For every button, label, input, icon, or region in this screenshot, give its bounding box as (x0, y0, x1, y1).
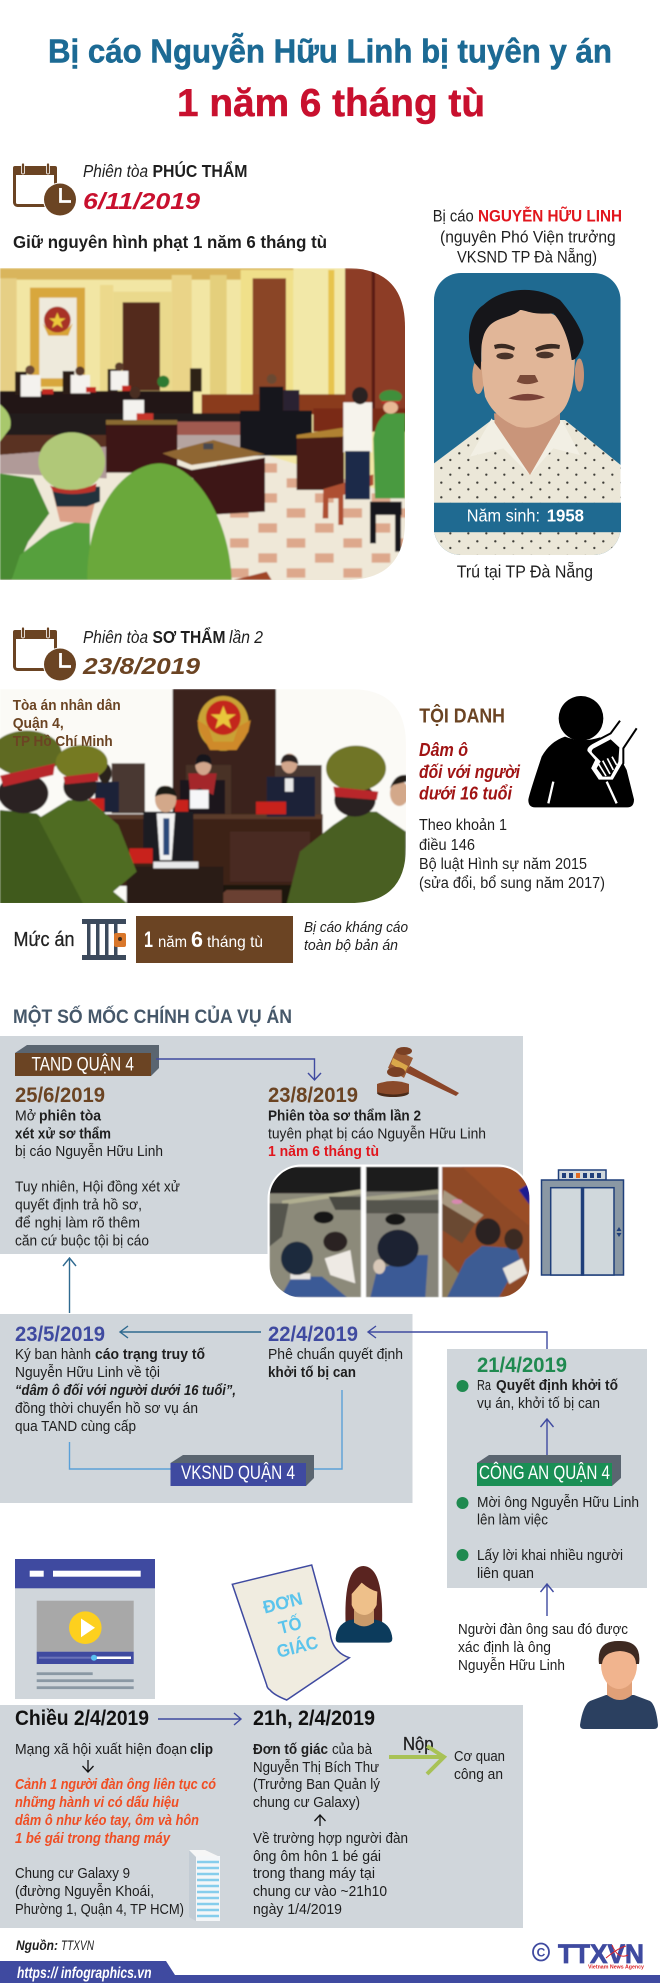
text: 23/8/2019: 1 năm 6 tháng tù (268, 1143, 379, 1160)
bullet text: decision: Ra (477, 1377, 491, 1394)
bullet text: summons: lên làm việc (477, 1512, 548, 1528)
text: clip appears: Mạng xã hội xuất hiện đoạn (15, 1741, 187, 1758)
icon: elevator (542, 1170, 624, 1275)
text: clip description: 1 bé gái trong thang máy (15, 1830, 171, 1847)
legal basis text: (sửa đổi, bổ sung năm 2017) (419, 875, 605, 892)
arrow: TAND to sentence (156, 1059, 321, 1080)
arrow: 21/4 to 22/4 (368, 1326, 547, 1349)
text: address: (đường Nguyễn Khoái, (15, 1883, 154, 1900)
icon: complaint letter (232, 1565, 349, 1700)
appeal trial heading: Phiên tòa (83, 161, 148, 181)
text: case details: ông ôm hôn 1 bé gái (253, 1848, 381, 1865)
text: 25/6/2019: quyết định trả hồ sơ, (15, 1197, 142, 1214)
text: 25/6/2019 (15, 1083, 180, 1250)
text: 25/6/2019: căn cứ buộc tội bị cáo (15, 1232, 149, 1250)
text: 23/5/2019: cáo trạng truy tố (95, 1346, 205, 1363)
arrow: afternoon to night (158, 1713, 241, 1725)
text: 21/4/2019: 21/4/2019 (477, 1353, 567, 1377)
text: clip description: dâm ô như kéo tay, ôm và hôn (15, 1812, 199, 1829)
sentence box: 6 (191, 927, 203, 952)
text: 25/6/2019: để nghị làm rõ thêm (15, 1215, 140, 1232)
text: case details (253, 1830, 408, 1918)
legal basis text: điều 146 (419, 837, 475, 854)
text: clip description (15, 1776, 216, 1847)
bullet text: decision: Quyết định khởi tố (496, 1377, 618, 1394)
icon: gavel (377, 1047, 459, 1097)
defendant name and title: (nguyên Phó Viện trưởng (440, 229, 616, 247)
arrow: 22/4 to 23/5 (120, 1326, 261, 1338)
text: 22/4/2019: 22/4/2019 (268, 1322, 358, 1346)
arrow: up to TAND panel (63, 1258, 76, 1313)
appeal note: Bị cáo kháng cáo (304, 919, 408, 936)
date: afternoon: Chiều 2/4/2019 (15, 1706, 149, 1730)
text: 23/5/2019: 23/5/2019 (15, 1322, 105, 1346)
text: 23/8/2019: Phiên tòa sơ thẩm lần 2 (268, 1108, 421, 1125)
text: 25/6/2019: xét xử sơ thẩm (15, 1126, 111, 1142)
logo: TTXVN: TTXVN (558, 1939, 644, 1969)
source: TTXVN (61, 1937, 95, 1953)
text: address: Phường 1, Quận 4, TP HCM) (15, 1901, 184, 1918)
text: 25/6/2019: Tuy nhiên, Hội đồng xét xử (15, 1179, 180, 1196)
bullet text: summons (456, 1494, 639, 1528)
legal basis text (419, 817, 605, 892)
portrait card (434, 273, 621, 555)
text: case details: trong thang máy tại (253, 1865, 375, 1882)
text: address: Chung cư Galaxy 9 (15, 1865, 130, 1882)
text: clip description: những hành vi có dấu hiệu (15, 1794, 179, 1811)
appeal verdict text: Giữ nguyên hình phạt 1 năm 6 tháng tù (13, 232, 327, 252)
label: TAND Quận 4 (15, 1045, 159, 1076)
text: man identified: xác định là ông (458, 1639, 551, 1656)
icon: complaint letter: ĐƠN (261, 1588, 305, 1618)
court name: TP Hồ Chí Minh (13, 733, 113, 750)
connector: VKSND lines (70, 1390, 342, 1469)
text: clip appears: clip (190, 1741, 213, 1758)
photo: first-instance courtroom (0, 689, 409, 905)
defendant name and title: NGUYỄN HỮU LINH (478, 206, 622, 226)
icon: building (189, 1850, 220, 1921)
text: address (15, 1865, 184, 1918)
residence: Trú tại TP Đà Nẵng (457, 562, 593, 582)
text: 23/5/2019: qua TAND cùng cấp (15, 1418, 136, 1435)
text: 23/5/2019: Ký ban hành (15, 1346, 91, 1363)
text: police agency: Cơ quan (454, 1748, 505, 1765)
text: 22/4/2019 (268, 1322, 403, 1381)
arrow: submit to police (389, 1746, 444, 1774)
text: case details: chung cư vào ~21h10 (253, 1883, 387, 1900)
bullet text: statements (456, 1547, 623, 1582)
sentence box: tháng tù (207, 934, 263, 951)
label: VKSND Quận 4: VKSND QUẬN 4 (181, 1462, 295, 1484)
text: submit: Nộp (403, 1734, 434, 1754)
icon: calendar and clock (first-instance trial) (13, 627, 77, 682)
text: complaint: chung cư Galaxy) (253, 1794, 360, 1811)
photo: appeal courtroom (0, 268, 407, 582)
first-instance heading: SƠ THẨM (152, 626, 226, 647)
text: police agency (454, 1748, 505, 1783)
timeline heading: MỘT SỐ MỐC CHÍNH CỦA VỤ ÁN (13, 1004, 292, 1028)
sentence box: 1 (144, 927, 153, 952)
icon: video page (15, 1559, 155, 1699)
appeal note (304, 919, 408, 954)
label: VKSND Quận 4 (170, 1455, 314, 1486)
charge name: dưới 16 tuổi (419, 782, 513, 804)
bullet text: statements: Lấy lời khai nhiều người (477, 1547, 623, 1564)
icon: complaint letter: GIÁC (274, 1631, 320, 1662)
appeal trial date: 6/11/2019 (83, 188, 200, 214)
charge name: đối với người (419, 761, 521, 782)
panel: TAND Quận 4 (0, 1036, 523, 1254)
arrow: man to police panel (540, 1584, 554, 1616)
court name: Tòa án nhân dân (13, 697, 121, 714)
text: complaint: (Trưởng Ban Quản lý (253, 1776, 380, 1793)
text: complaint: Đơn tố giác (253, 1741, 328, 1758)
icon: calendar and clock (appeal trial) (13, 163, 77, 216)
first-instance heading: Phiên tòa (83, 627, 148, 647)
text: 25/6/2019: bị cáo Nguyễn Hữu Linh (15, 1143, 163, 1160)
label: TAND Quận 4: TAND QUẬN 4 (32, 1054, 134, 1076)
label: Công an Quận 4: CÔNG AN QUẬN 4 (479, 1462, 610, 1484)
sentence box (136, 916, 293, 963)
text: 23/5/2019 (15, 1322, 236, 1435)
panel: April 2 events (0, 1705, 523, 1928)
birth year band: Năm sinh: (467, 506, 540, 526)
bullet text: summons: Mời ông Nguyễn Hữu Linh (477, 1494, 639, 1511)
bullet text: decision: vụ án, khởi tố bị can (477, 1395, 600, 1412)
defendant name and title: VKSND TP Đà Nẵng) (457, 248, 597, 267)
sentence box: năm (158, 934, 187, 951)
label: Công an Quận 4 (477, 1455, 621, 1486)
text: 23/5/2019: “dâm ô đối với người dưới 16 tuổi”, (15, 1382, 236, 1399)
text: 23/5/2019: Nguyễn Hữu Linh về tội (15, 1364, 160, 1381)
appeal trial heading (83, 160, 248, 181)
icon: prison bars (82, 919, 126, 960)
text: case details: Về trường hợp người đàn (253, 1830, 408, 1847)
charge name: Dâm ô (419, 739, 468, 760)
birth year band: 1958 (547, 506, 584, 526)
source (16, 1937, 95, 1953)
first-instance date: 23/8/2019 (82, 653, 200, 679)
panel: Công an Quận 4 (447, 1349, 647, 1588)
text: complaint: của bà (332, 1741, 373, 1758)
text: 22/4/2019: khởi tố bị can (268, 1364, 356, 1381)
first-instance heading: lần 2 (229, 627, 263, 647)
arrow: up to complaint (314, 1815, 326, 1826)
icon: woman (336, 1566, 392, 1643)
arrow: police to decision (540, 1419, 554, 1462)
text: 22/4/2019: Phê chuẩn quyết định (268, 1346, 403, 1363)
text: police agency: công an (454, 1766, 503, 1783)
text: clip description: Cảnh 1 người đàn ông liên tục có (15, 1776, 216, 1793)
arrow: down to description (82, 1760, 94, 1772)
text: 23/8/2019: 23/8/2019 (268, 1083, 358, 1107)
icon: person with hand on shoulder (528, 696, 637, 807)
text: case details: ngày 1/4/2019 (253, 1901, 342, 1918)
court name: Quận 4, (13, 715, 64, 732)
legal basis text: Theo khoản 1 (419, 817, 507, 834)
text: 25/6/2019: phiên tòa (39, 1108, 102, 1125)
first-instance heading (83, 626, 263, 647)
text: complaint: Nguyễn Thị Bích Thư (253, 1759, 379, 1776)
bullet text: decision (456, 1377, 618, 1412)
appeal note: toàn bộ bản án (304, 937, 398, 954)
bullet text: statements: liên quan (477, 1565, 534, 1582)
date: night: 21h, 2/4/2019 (253, 1706, 375, 1730)
text: 23/8/2019: tuyên phạt bị cáo Nguyễn Hữu Linh (268, 1126, 486, 1142)
text: 25/6/2019: Mở (15, 1108, 36, 1125)
icon: complaint letter: TỐ (276, 1612, 304, 1638)
source: Nguồn: (16, 1937, 58, 1953)
legal basis text: Bộ luật Hình sự năm 2015 (419, 856, 587, 873)
title: Bị cáo Nguyễn Hữu Linh bị tuyên y án (48, 33, 612, 70)
sentence label: Mức án (14, 929, 74, 951)
panel: VKSND Quận 4 (0, 1314, 412, 1503)
appeal trial heading: PHÚC THẨM (152, 160, 248, 181)
footer bar with URL (0, 1961, 660, 1983)
court name (13, 697, 121, 750)
defendant name and title (433, 206, 622, 267)
charge name (419, 739, 521, 804)
icon: man (580, 1641, 658, 1729)
footer bar with URL: https:// infographics.vn (17, 1965, 152, 1982)
charge heading: TỘI DANH (419, 704, 505, 728)
text: man identified (458, 1621, 628, 1674)
text: 25/6/2019: 25/6/2019 (15, 1083, 105, 1107)
text: man identified: Nguyễn Hữu Linh (458, 1657, 565, 1674)
logo: TTXVN: C (537, 1946, 546, 1960)
text: 23/8/2019 (268, 1083, 486, 1160)
title (48, 33, 612, 125)
text: complaint (253, 1741, 380, 1811)
text: man identified: Người đàn ông sau đó được (458, 1621, 628, 1638)
birth year band (434, 503, 621, 532)
logo: TTXVN: Vietnam News Agency (588, 1964, 645, 1970)
defendant name and title: Bị cáo (433, 208, 474, 226)
photo: elevator CCTV stills (268, 1164, 532, 1300)
text: 23/5/2019: đồng thời chuyển hồ sơ vụ án (15, 1400, 198, 1417)
title: 1 năm 6 tháng tù (177, 82, 485, 125)
